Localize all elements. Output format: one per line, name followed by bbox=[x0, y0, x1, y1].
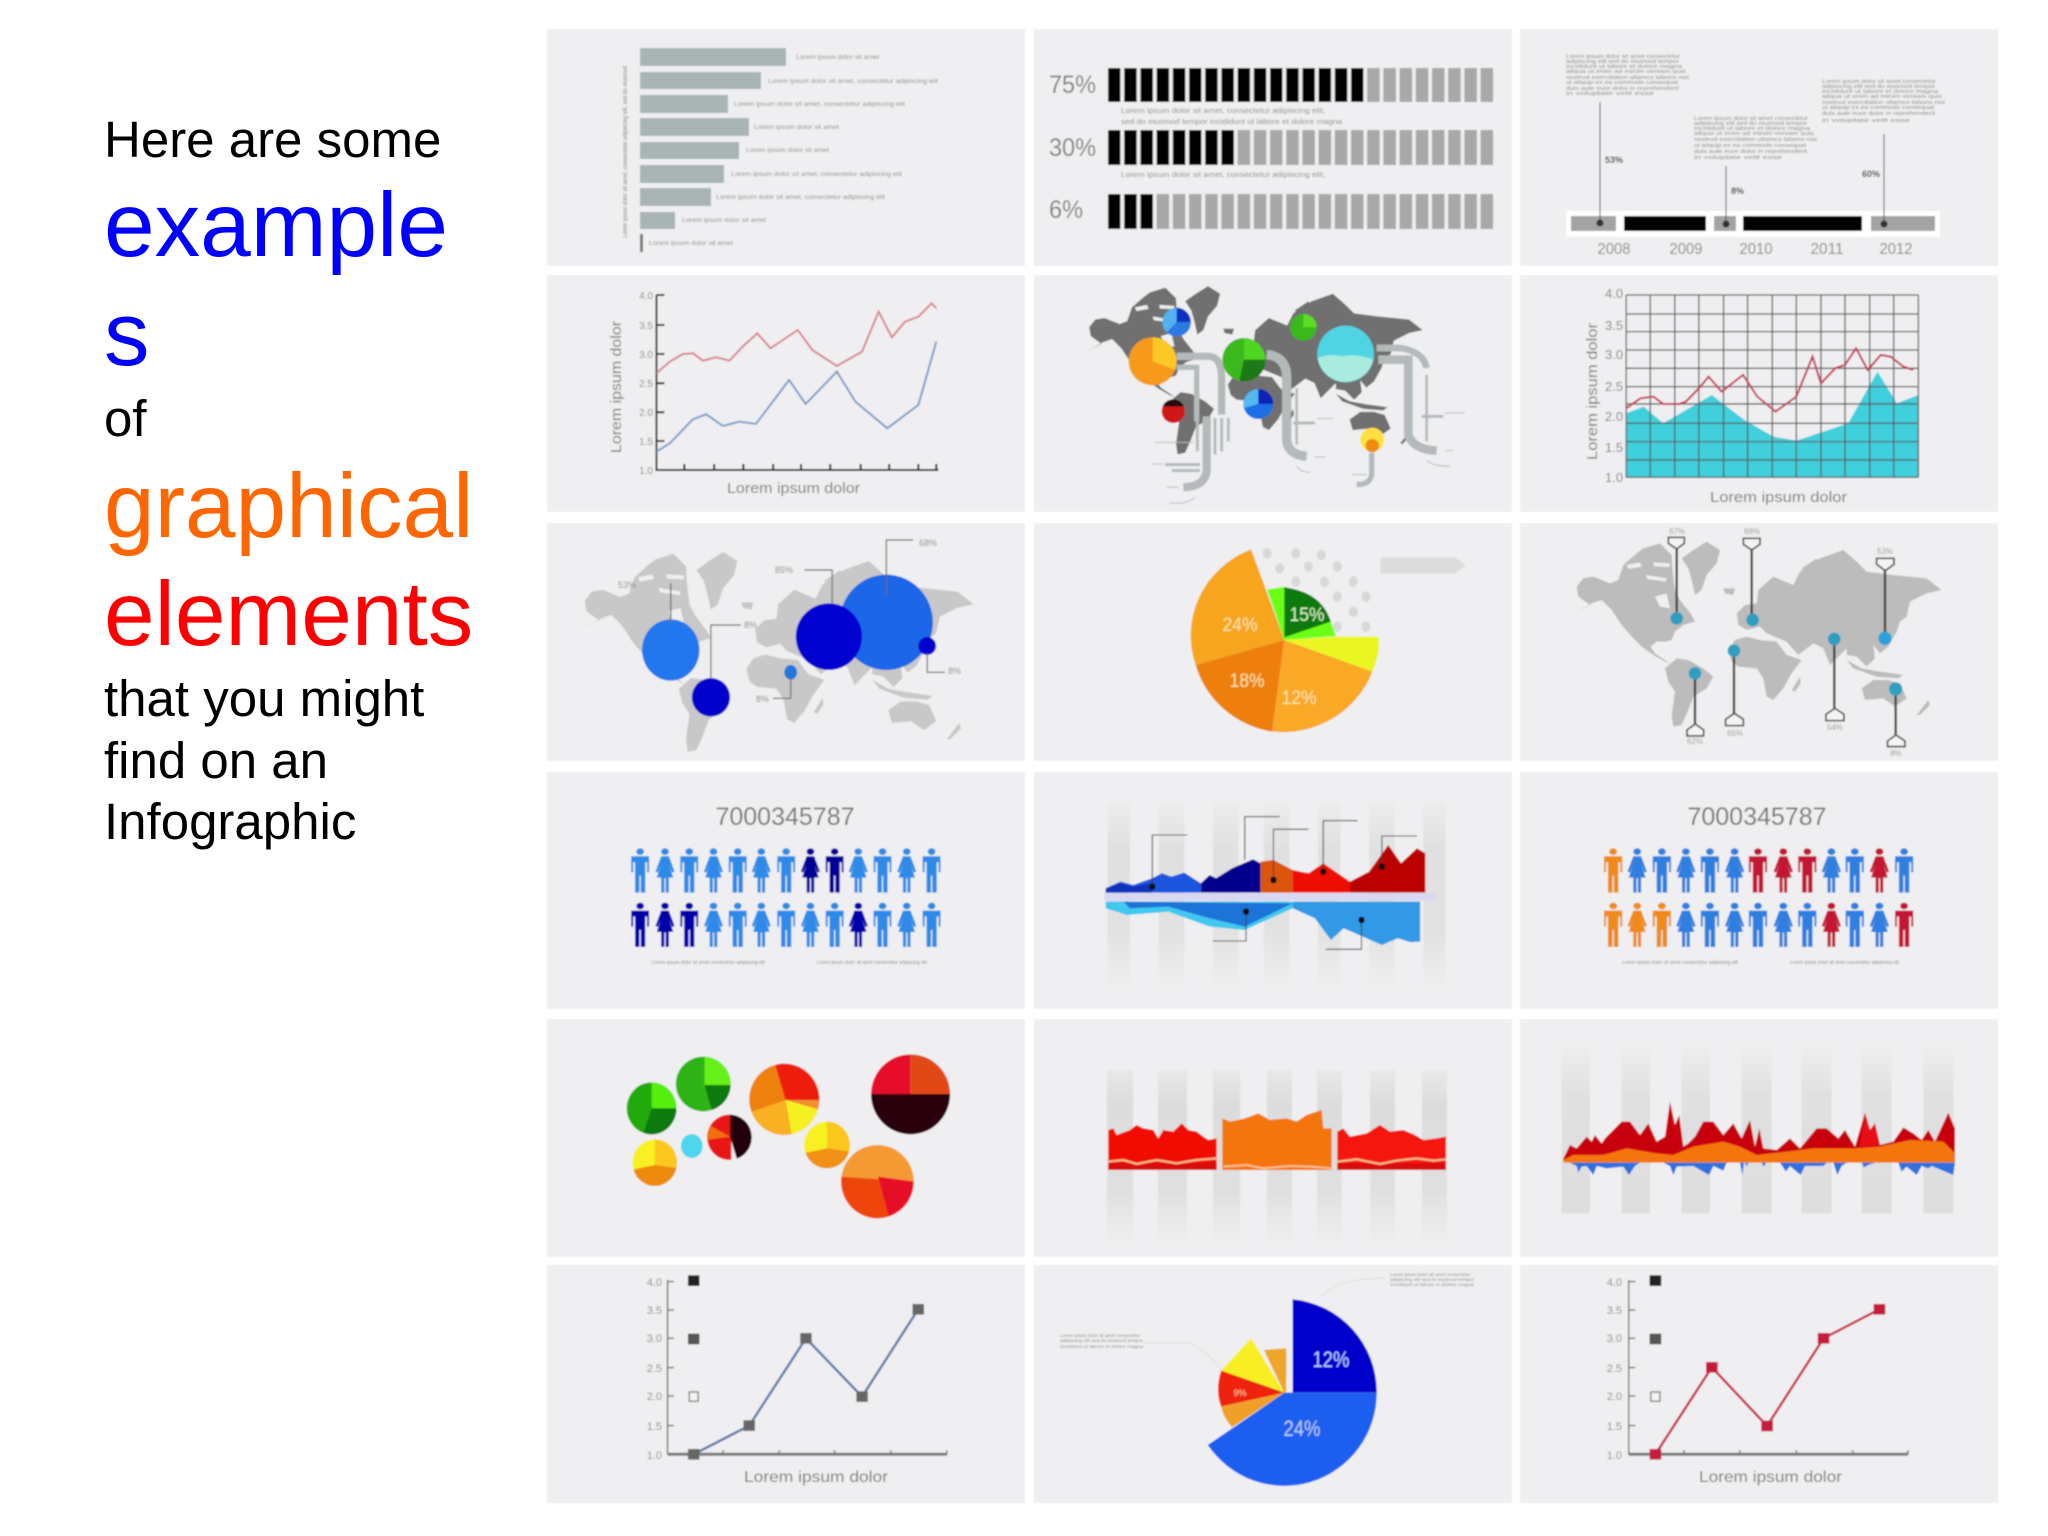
leader lines bbox=[1143, 1278, 1385, 1371]
year labels: 2012 bbox=[1880, 241, 1913, 258]
bar labels: Lorem ipsum dolor sit amet, consectetur adipiscing elit bbox=[768, 79, 938, 85]
text blocks: ut aliquip ex ea commodo consequat bbox=[1566, 80, 1679, 86]
panel: timeline bbox=[1520, 29, 1998, 266]
red block left bbox=[1108, 1123, 1217, 1170]
text blocks: adipiscing elit sed do eiusmod tempor bbox=[1694, 121, 1807, 127]
pie: mid blue bbox=[1243, 389, 1273, 419]
grid bbox=[1626, 295, 1918, 477]
leader lines bbox=[671, 540, 945, 698]
people row 1 bbox=[1604, 848, 1913, 893]
text blocks: adipiscing elit sed do eiusmod tempor bbox=[1822, 84, 1935, 90]
heading: intro text: Infographic bbox=[104, 793, 356, 850]
pin markers bbox=[1670, 612, 1902, 696]
pin labels: 53% bbox=[1877, 547, 1893, 556]
axis label: Lorem ipsum dolor sit amet, consectetur adipiscing elit, sed do eiusmod bbox=[623, 66, 629, 238]
y labels: 1.5 bbox=[1607, 1421, 1622, 1433]
captions: Lorem ipsum dolor sit amet, consectetur adipiscing elit, bbox=[1121, 172, 1325, 179]
pie labels: 24% bbox=[1284, 1416, 1320, 1441]
year labels bbox=[1598, 241, 1913, 258]
heading: intro text: that you might bbox=[104, 670, 424, 727]
y labels: 2.5 bbox=[1605, 379, 1623, 394]
year labels: 2011 bbox=[1810, 241, 1844, 258]
upper areas bbox=[1106, 845, 1425, 893]
y labels: 2.0 bbox=[647, 1391, 662, 1403]
heading: intro text: find on an bbox=[104, 732, 328, 789]
captions: sed do eiusmod tempor incididunt ut labore et dolore magna bbox=[1121, 119, 1342, 126]
panel: world map with pies and pipes bbox=[1034, 275, 1512, 512]
line bbox=[694, 1309, 918, 1454]
panel: red line chart with markers bbox=[1520, 1265, 1998, 1503]
pin labels: 65% bbox=[1727, 729, 1743, 738]
background strips bbox=[1107, 1070, 1447, 1247]
pale trend lines bbox=[1108, 1158, 1446, 1168]
axes bbox=[1629, 1280, 1908, 1454]
small pie label: 9% bbox=[1233, 1388, 1247, 1398]
percent labels: 53% bbox=[1605, 155, 1623, 165]
callout bbox=[1381, 557, 1466, 573]
bubble labels bbox=[618, 538, 961, 704]
captions: Lorem ipsum dolor sit amet consectetur adipiscing elit bbox=[1790, 960, 1900, 966]
panel: bubble world map bbox=[547, 523, 1025, 761]
pin lines bbox=[1677, 548, 1896, 735]
axis labels: 2.0 bbox=[639, 408, 653, 419]
markers bbox=[688, 1304, 924, 1460]
text blocks: Lorem ipsum dolor sit amet consectetur bbox=[1822, 79, 1936, 85]
text blocks: duis aute irure dolor in reprehenderit bbox=[1822, 111, 1936, 117]
panel: red and orange area blocks bbox=[1034, 1019, 1512, 1257]
green pie left bbox=[626, 1081, 678, 1136]
captions: Lorem ipsum dolor sit amet consectetur adipiscing elit bbox=[652, 960, 766, 966]
y labels: 4.0 bbox=[1607, 1277, 1622, 1289]
y labels bbox=[647, 1277, 662, 1462]
people row 2 bbox=[631, 903, 941, 947]
year labels: 2008 bbox=[1598, 241, 1631, 258]
heading: intro text bbox=[104, 111, 473, 850]
axis labels: 3.5 bbox=[639, 321, 653, 332]
year labels: 2009 bbox=[1670, 241, 1703, 258]
captions bbox=[652, 960, 928, 966]
y labels: 3.0 bbox=[1607, 1333, 1622, 1345]
text blocks: aliqua ut enim ad minim veniam quis bbox=[1822, 94, 1943, 100]
pin labels: 67% bbox=[1669, 527, 1685, 536]
bubbles bbox=[642, 575, 936, 717]
bar labels: Lorem ipsum dolor sit amet bbox=[796, 55, 879, 61]
axis titles: Lorem ipsum dolor bbox=[608, 321, 625, 453]
y labels: 1.0 bbox=[647, 1450, 662, 1462]
red block right bbox=[1337, 1125, 1446, 1170]
bar labels: Lorem ipsum dolor sit amet, consectetur adipiscing elit bbox=[734, 102, 905, 108]
axis labels: 2.5 bbox=[639, 379, 653, 390]
markers bbox=[1650, 1304, 1885, 1460]
pie: blue bbox=[1162, 308, 1191, 336]
people row 1 bbox=[631, 848, 941, 893]
orange block bbox=[1222, 1110, 1332, 1170]
text blocks: in voluptate velit esse bbox=[1822, 118, 1910, 124]
pie: big green bbox=[1222, 338, 1266, 381]
bar labels: Lorem ipsum dolor sit amet, consectetur adipiscing elit bbox=[716, 195, 885, 201]
panel: red spikes and blue reflection bbox=[1520, 1019, 1998, 1257]
text blocks: duis aute irure dolor in reprehenderit bbox=[1694, 149, 1808, 155]
heading: intro text: example bbox=[104, 175, 448, 276]
leader lines bbox=[1597, 102, 1887, 227]
text blocks: incididunt ut labore et dolore magna bbox=[1566, 64, 1682, 70]
axes bbox=[668, 1280, 947, 1454]
y labels: 4.0 bbox=[1605, 286, 1623, 301]
panel: two-series line chart bbox=[547, 275, 1025, 512]
axis titles bbox=[1584, 323, 1847, 506]
red and black pie bbox=[868, 1053, 953, 1136]
segments: 75% bbox=[1108, 68, 1493, 102]
text blocks: ut aliquip ex ea commodo consequat bbox=[1822, 105, 1935, 111]
red line bbox=[1626, 348, 1913, 412]
panel: blue and red wave chart bbox=[1034, 772, 1512, 1009]
pin labels: 62% bbox=[1687, 737, 1703, 746]
pie: orange bbox=[1129, 337, 1177, 385]
orange area bbox=[1563, 1140, 1955, 1163]
text blocks bbox=[1566, 54, 1945, 161]
text blocks: Lorem ipsum dolor sit amet consectetur bbox=[1566, 54, 1680, 60]
pin labels bbox=[1669, 527, 1902, 758]
pin flags bbox=[1668, 537, 1905, 747]
teal area bbox=[1626, 372, 1918, 477]
blue spikes bbox=[1570, 1163, 1955, 1175]
y labels: 1.0 bbox=[1607, 1450, 1622, 1462]
legend squares bbox=[688, 1275, 699, 1401]
callout text blocks: adipiscing elit sed do eiusmod tempor bbox=[1060, 1338, 1144, 1343]
callout lines bbox=[1149, 817, 1417, 949]
text blocks: ut aliquip ex ea commodo consequat bbox=[1694, 143, 1807, 149]
panel: pie cluster bbox=[547, 1019, 1025, 1257]
callout text blocks bbox=[1060, 1272, 1475, 1349]
bubble labels: 53% bbox=[618, 580, 636, 590]
x title: Lorem ipsum dolor bbox=[1699, 1469, 1843, 1486]
y labels: 2.0 bbox=[1605, 409, 1623, 424]
axis band bbox=[1104, 893, 1436, 901]
lower dark bands bbox=[1108, 1163, 1446, 1170]
bubble labels: 8% bbox=[948, 666, 961, 676]
yellow pie left bbox=[631, 1138, 679, 1187]
bubble labels: 8% bbox=[744, 620, 757, 630]
x title: Lorem ipsum dolor bbox=[744, 1469, 889, 1486]
percent labels: 60% bbox=[1862, 169, 1880, 179]
text blocks: nostrud exercitation ullamco laboris nisi bbox=[1694, 137, 1817, 143]
pin labels: 68% bbox=[1744, 527, 1760, 536]
text blocks: Lorem ipsum dolor sit amet consectetur bbox=[1694, 116, 1808, 122]
captions: Lorem ipsum dolor sit amet, consectetur adipiscing elit, bbox=[1121, 108, 1325, 115]
axis labels: 4.0 bbox=[639, 291, 653, 302]
captions: Lorem ipsum dolor sit amet consectetur adipiscing elit bbox=[817, 960, 928, 966]
y labels: 2.5 bbox=[1607, 1363, 1622, 1375]
year labels: 2010 bbox=[1740, 241, 1773, 258]
callout text blocks: Lorem ipsum dolor sit amet consectetur bbox=[1390, 1272, 1470, 1277]
panel: pin world map bbox=[1520, 523, 1998, 761]
pie: cyan bbox=[1317, 326, 1374, 382]
panel: horizontal bar chart bbox=[547, 29, 1025, 266]
percent labels: 8% bbox=[1731, 186, 1744, 196]
callout text blocks: incididunt ut labore et dolore magna bbox=[1060, 1344, 1144, 1349]
captions bbox=[1121, 108, 1342, 179]
axis labels: 1.0 bbox=[639, 466, 653, 477]
pie wedges bbox=[1208, 1299, 1377, 1486]
pie labels bbox=[1284, 1347, 1350, 1441]
panel: blue pie chart bbox=[1034, 1265, 1512, 1503]
bubble labels: 85% bbox=[775, 565, 793, 575]
y labels bbox=[1605, 286, 1623, 485]
labels: 75% bbox=[1049, 71, 1096, 99]
panel: blue population icons bbox=[547, 772, 1025, 1009]
dots bbox=[1263, 548, 1370, 632]
pie labels: 12% bbox=[1312, 1347, 1350, 1372]
pin labels: 8% bbox=[1890, 749, 1902, 758]
axis titles bbox=[608, 321, 860, 497]
people row 2 bbox=[1604, 903, 1913, 947]
text blocks: incididunt ut labore et dolore magna bbox=[1822, 89, 1938, 95]
y labels: 3.5 bbox=[1605, 318, 1623, 333]
population number: 7000345787 bbox=[715, 803, 855, 831]
panel: blue line chart with markers bbox=[547, 1265, 1025, 1503]
orange and red pie bbox=[840, 1144, 915, 1219]
background strips bbox=[1562, 1047, 1953, 1213]
text blocks: in voluptate velit esse bbox=[1694, 155, 1782, 161]
yellow pie right bbox=[803, 1121, 851, 1169]
text blocks: incididunt ut labore et dolore magna bbox=[1694, 126, 1810, 132]
y labels: 3.5 bbox=[1607, 1305, 1622, 1317]
text blocks: aliqua ut enim ad minim veniam quis bbox=[1566, 69, 1687, 75]
text blocks: in voluptate velit esse bbox=[1566, 91, 1654, 97]
bar labels: Lorem ipsum dolor sit amet bbox=[682, 218, 766, 224]
axis labels: 3.0 bbox=[639, 350, 653, 361]
legend squares bbox=[1650, 1275, 1661, 1401]
heading: intro text: graphical bbox=[104, 456, 473, 557]
dark red area bbox=[1563, 1102, 1955, 1160]
text blocks: aliqua ut enim ad minim veniam quis bbox=[1694, 131, 1815, 137]
map bbox=[1575, 542, 1942, 727]
pie labels: 15% bbox=[1290, 605, 1325, 626]
y labels: 1.5 bbox=[1605, 440, 1623, 455]
timeline band bbox=[1566, 211, 1940, 237]
heading: intro text: of bbox=[104, 390, 147, 447]
grid of infographic thumbnails bbox=[547, 29, 1998, 1503]
bubble labels: 8% bbox=[756, 694, 769, 704]
map bbox=[583, 552, 973, 752]
segments: 6% bbox=[1108, 194, 1493, 229]
lower areas bbox=[1106, 902, 1420, 945]
pie: yellow bbox=[1360, 428, 1384, 452]
pie: small green bbox=[1290, 314, 1317, 341]
panel: percentage segmented bars bbox=[1034, 29, 1512, 266]
axis titles: Lorem ipsum dolor bbox=[727, 480, 860, 497]
multicolour pie bbox=[747, 1063, 824, 1137]
panel: grid chart with area and line bbox=[1520, 275, 1998, 512]
bright red highlights bbox=[1860, 1113, 1880, 1147]
population number: 7000345787 bbox=[1687, 803, 1827, 831]
chart lines and axes bbox=[656, 295, 938, 470]
bar labels bbox=[649, 55, 938, 247]
panel: orange pie chart bbox=[1034, 523, 1512, 761]
bubble labels: 68% bbox=[919, 538, 937, 548]
small red and black pie bbox=[706, 1113, 754, 1162]
text blocks: duis aute irure dolor in reprehenderit bbox=[1566, 86, 1680, 92]
y labels: 3.0 bbox=[647, 1333, 662, 1345]
labels bbox=[1049, 71, 1096, 224]
pie labels: 18% bbox=[1230, 671, 1265, 692]
axis titles: Lorem ipsum dolor bbox=[1584, 323, 1601, 460]
callout text blocks: adipiscing elit sed do eiusmod tempor bbox=[1390, 1277, 1475, 1282]
bar labels: Lorem ipsum dolor sit amet, consectetur adipiscing elit bbox=[731, 172, 902, 178]
pipes bbox=[1152, 348, 1465, 503]
bars bbox=[640, 48, 786, 252]
y labels: 2.5 bbox=[647, 1363, 662, 1375]
text blocks: nostrud exercitation ullamco laboris nisi bbox=[1566, 75, 1689, 81]
line bbox=[1655, 1309, 1879, 1454]
heading: intro text: elements bbox=[104, 564, 473, 665]
heading: intro text: Here are some bbox=[104, 111, 441, 168]
y labels: 2.0 bbox=[1607, 1391, 1622, 1403]
heading: intro text: s bbox=[104, 284, 150, 385]
y labels bbox=[1607, 1277, 1622, 1462]
callout text blocks: incididunt ut labore et dolore magna bbox=[1390, 1282, 1475, 1287]
y labels: 1.5 bbox=[647, 1421, 662, 1433]
segments: 30% bbox=[1108, 130, 1493, 165]
captions: Lorem ipsum dolor sit amet consectetur adipiscing elit bbox=[1622, 960, 1739, 966]
axis titles: Lorem ipsum dolor bbox=[1710, 489, 1847, 506]
y labels: 1.0 bbox=[1605, 470, 1623, 485]
captions bbox=[1622, 960, 1900, 966]
text blocks: adipiscing elit sed do eiusmod tempor bbox=[1566, 59, 1679, 65]
pie labels: 24% bbox=[1222, 615, 1258, 636]
callout text blocks: Lorem ipsum dolor sit amet consectetur bbox=[1060, 1333, 1140, 1338]
axis labels: 1.5 bbox=[639, 437, 653, 448]
text blocks: nostrud exercitation ullamco laboris nisi bbox=[1822, 100, 1945, 106]
pie labels bbox=[1222, 605, 1325, 709]
pie wedges bbox=[1191, 549, 1379, 732]
percent labels bbox=[1605, 155, 1880, 196]
labels: 6% bbox=[1049, 196, 1083, 224]
pie labels: 12% bbox=[1282, 688, 1317, 709]
axis labels bbox=[639, 291, 653, 477]
background strips bbox=[1108, 803, 1446, 990]
pie: red bbox=[1162, 399, 1185, 423]
green pie top bbox=[674, 1055, 735, 1113]
dark map bbox=[1088, 286, 1423, 454]
cyan pie bbox=[681, 1134, 703, 1158]
bar labels: Lorem ipsum dolor sit amet bbox=[746, 148, 829, 154]
labels: 30% bbox=[1049, 134, 1096, 162]
bar labels: Lorem ipsum dolor sit amet bbox=[649, 241, 733, 247]
pin labels: 54% bbox=[1827, 723, 1843, 732]
y labels: 3.5 bbox=[647, 1305, 662, 1317]
panel: people icons orange, blue and red bbox=[1520, 772, 1998, 1009]
y labels: 3.0 bbox=[1605, 347, 1623, 362]
y labels: 4.0 bbox=[647, 1277, 662, 1289]
bar labels: Lorem ipsum dolor sit amet bbox=[754, 125, 839, 131]
